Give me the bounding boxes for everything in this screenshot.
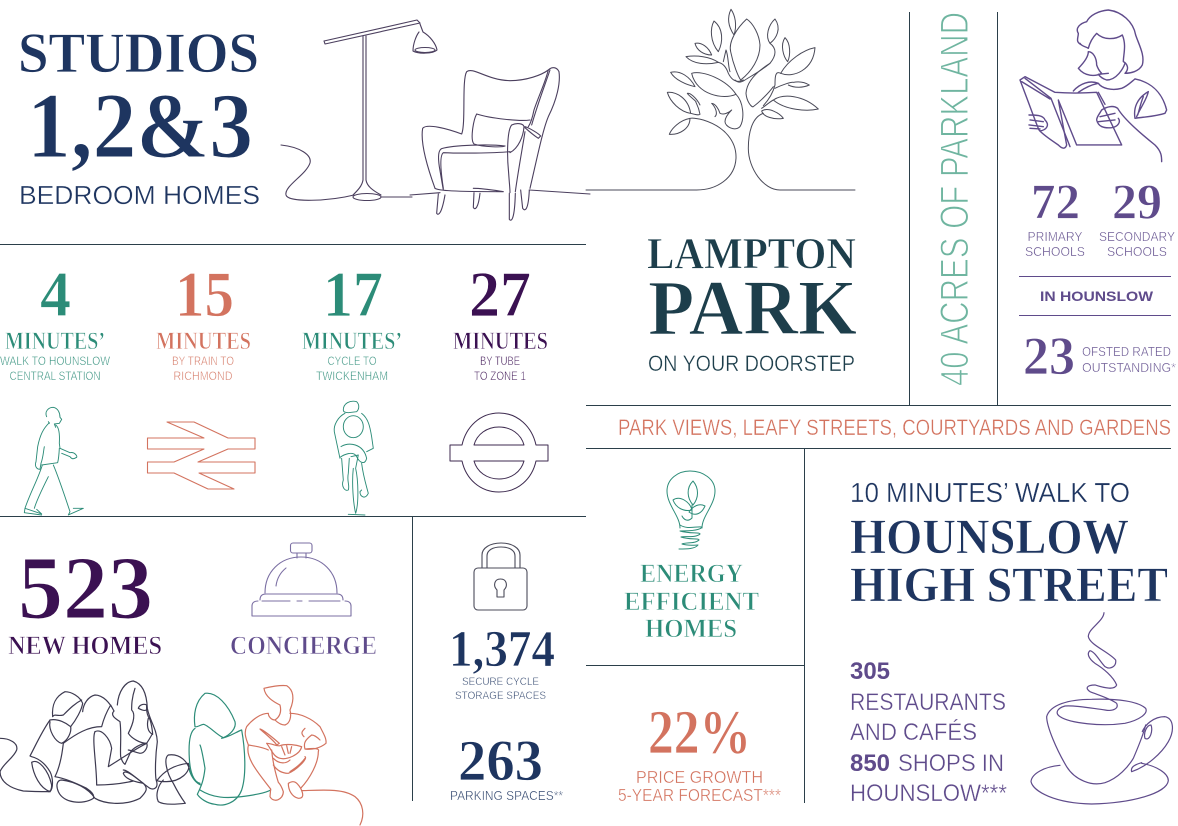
heading: lampton: LAMPTON: [647, 229, 856, 278]
text: restaurants and shops: [850, 658, 1007, 807]
heading: energy: ENERGY: [640, 559, 743, 588]
number: 15: 15: [175, 259, 234, 331]
panel: studios heading: [18, 22, 260, 210]
panel: new homes: [8, 539, 162, 660]
icon: coffee cup with steam: [1031, 613, 1172, 804]
text: restaurants and shops: SHOPS IN: [898, 750, 1004, 777]
panel: train 15 minutes: [156, 259, 251, 383]
sub-drawing: three seated figures: [0, 681, 190, 804]
label: concierge: CONCIERGE: [230, 631, 377, 660]
number: 17: 17: [323, 259, 383, 331]
label: minutes tube: MINUTES: [453, 328, 548, 355]
text: primary schools: [1025, 229, 1085, 259]
text: by tube to zone 1: TO ZONE 1: [474, 371, 526, 383]
panel: hounslow high street: [850, 477, 1168, 612]
text: restaurants and shops: RESTAURANTS: [850, 689, 1006, 716]
heading: hounslow: HOUNSLOW: [850, 508, 1129, 564]
text: secondary schools: [1099, 229, 1175, 259]
number: 23: 23: [1023, 326, 1075, 386]
text: secure cycle storage spaces: STORAGE SPACES: [455, 690, 546, 702]
text: primary schools: PRIMARY: [1028, 229, 1083, 244]
icon: concierge bell: [252, 543, 351, 616]
text: parking spaces: PARKING SPACES**: [450, 789, 563, 803]
label: minutes cycle: MINUTES’: [302, 328, 402, 355]
label: minutes train: MINUTES: [156, 328, 251, 355]
number: 29: 29: [1112, 173, 1162, 229]
text: restaurants and shops: HOUNSLOW***: [850, 780, 1007, 807]
icon: national rail double arrow: [148, 422, 255, 489]
number: 72: 72: [1031, 173, 1080, 229]
panel: energy efficient homes: [624, 559, 759, 643]
text: restaurants and shops: 850: [850, 750, 890, 777]
number: 27: 27: [469, 259, 531, 331]
text: secure cycle storage spaces: SECURE CYCLE: [462, 676, 539, 688]
sub-drawing: green figure: [189, 693, 271, 805]
panel: parking and cycle storage: [449, 621, 563, 803]
icon: cyclist from behind: [334, 401, 373, 515]
text: secondary schools: SCHOOLS: [1107, 244, 1167, 259]
number: 263: 263: [458, 728, 543, 793]
number: 22 percent: 22%: [648, 699, 751, 767]
icon: armchair: [410, 68, 590, 220]
text: walk to hounslow central station: [0, 356, 110, 383]
text: cycle to twickenham: [316, 356, 388, 383]
icon: light bulb with leaves: [667, 471, 715, 549]
text: ofsted rated outstanding: [1082, 344, 1176, 375]
text: by train to richmond: [172, 356, 234, 383]
text: cycle to twickenham: CYCLE TO: [328, 356, 377, 368]
text: restaurants and shops: AND CAFÉS: [850, 719, 977, 746]
icon: walking man: [24, 407, 83, 515]
text: walk to hounslow central station: WALK TO HOUNSLOW: [0, 356, 110, 368]
heading: bedroom count: 1,2&3: [27, 75, 253, 178]
panel: tube 27 minutes: [453, 259, 548, 383]
panel: walk 4 minutes: [0, 259, 110, 383]
heading: studios: STUDIOS: [18, 22, 259, 85]
label: new homes: NEW HOMES: [8, 631, 162, 660]
text: walk to hounslow central station: CENTRAL STATION: [10, 371, 100, 383]
text: 10 minutes walk to: 10 MINUTES’ WALK TO: [850, 477, 1130, 508]
icon: floor lamp: [281, 20, 437, 200]
panel: schools stats: [1023, 173, 1176, 386]
heading: homes: HOMES: [645, 614, 737, 643]
text: secure cycle storage spaces: [455, 676, 546, 702]
text: restaurants and shops: 305: [850, 658, 890, 685]
icon: padlock: [474, 543, 527, 610]
heading: park: PARK: [648, 264, 857, 351]
icon: tree line drawing: [586, 9, 855, 190]
text: by tube to zone 1: BY TUBE: [480, 356, 520, 368]
number: 1,374: 1,374: [449, 621, 555, 678]
icon: underground roundel: [450, 413, 548, 492]
label: minutes walk: MINUTES’: [5, 328, 105, 355]
text: price growth forecast: PRICE GROWTH: [636, 767, 763, 787]
number: 4: 4: [40, 259, 71, 331]
panel: cycle 17 minutes: [302, 259, 402, 383]
sub-drawing: coral figure: [245, 686, 363, 825]
icon: group of friends sitting line drawing: [0, 681, 363, 825]
icon: girl reading a book: [1020, 10, 1167, 162]
text: bedroom homes: BEDROOM HOMES: [19, 180, 260, 210]
text: primary schools: SCHOOLS: [1025, 244, 1085, 259]
number: 523: 523: [18, 539, 153, 638]
text: by train to richmond: BY TRAIN TO: [172, 356, 234, 368]
text: by tube to zone 1: [474, 356, 526, 383]
text: cycle to twickenham: TWICKENHAM: [316, 371, 388, 383]
panel: price growth: [618, 699, 781, 805]
text: by train to richmond: RICHMOND: [174, 371, 232, 383]
heading: efficient: EFFICIENT: [624, 587, 759, 616]
panel: lampton park title: [647, 229, 857, 376]
text: in hounslow: IN HOUNSLOW: [1040, 288, 1154, 304]
text: price growth forecast: [618, 767, 781, 805]
text: on your doorstep: ON YOUR DOORSTEP: [648, 351, 855, 376]
text: ofsted rated outstanding: OUTSTANDING*: [1082, 360, 1176, 375]
text: price growth forecast: 5-YEAR FORECAST***: [618, 785, 781, 805]
